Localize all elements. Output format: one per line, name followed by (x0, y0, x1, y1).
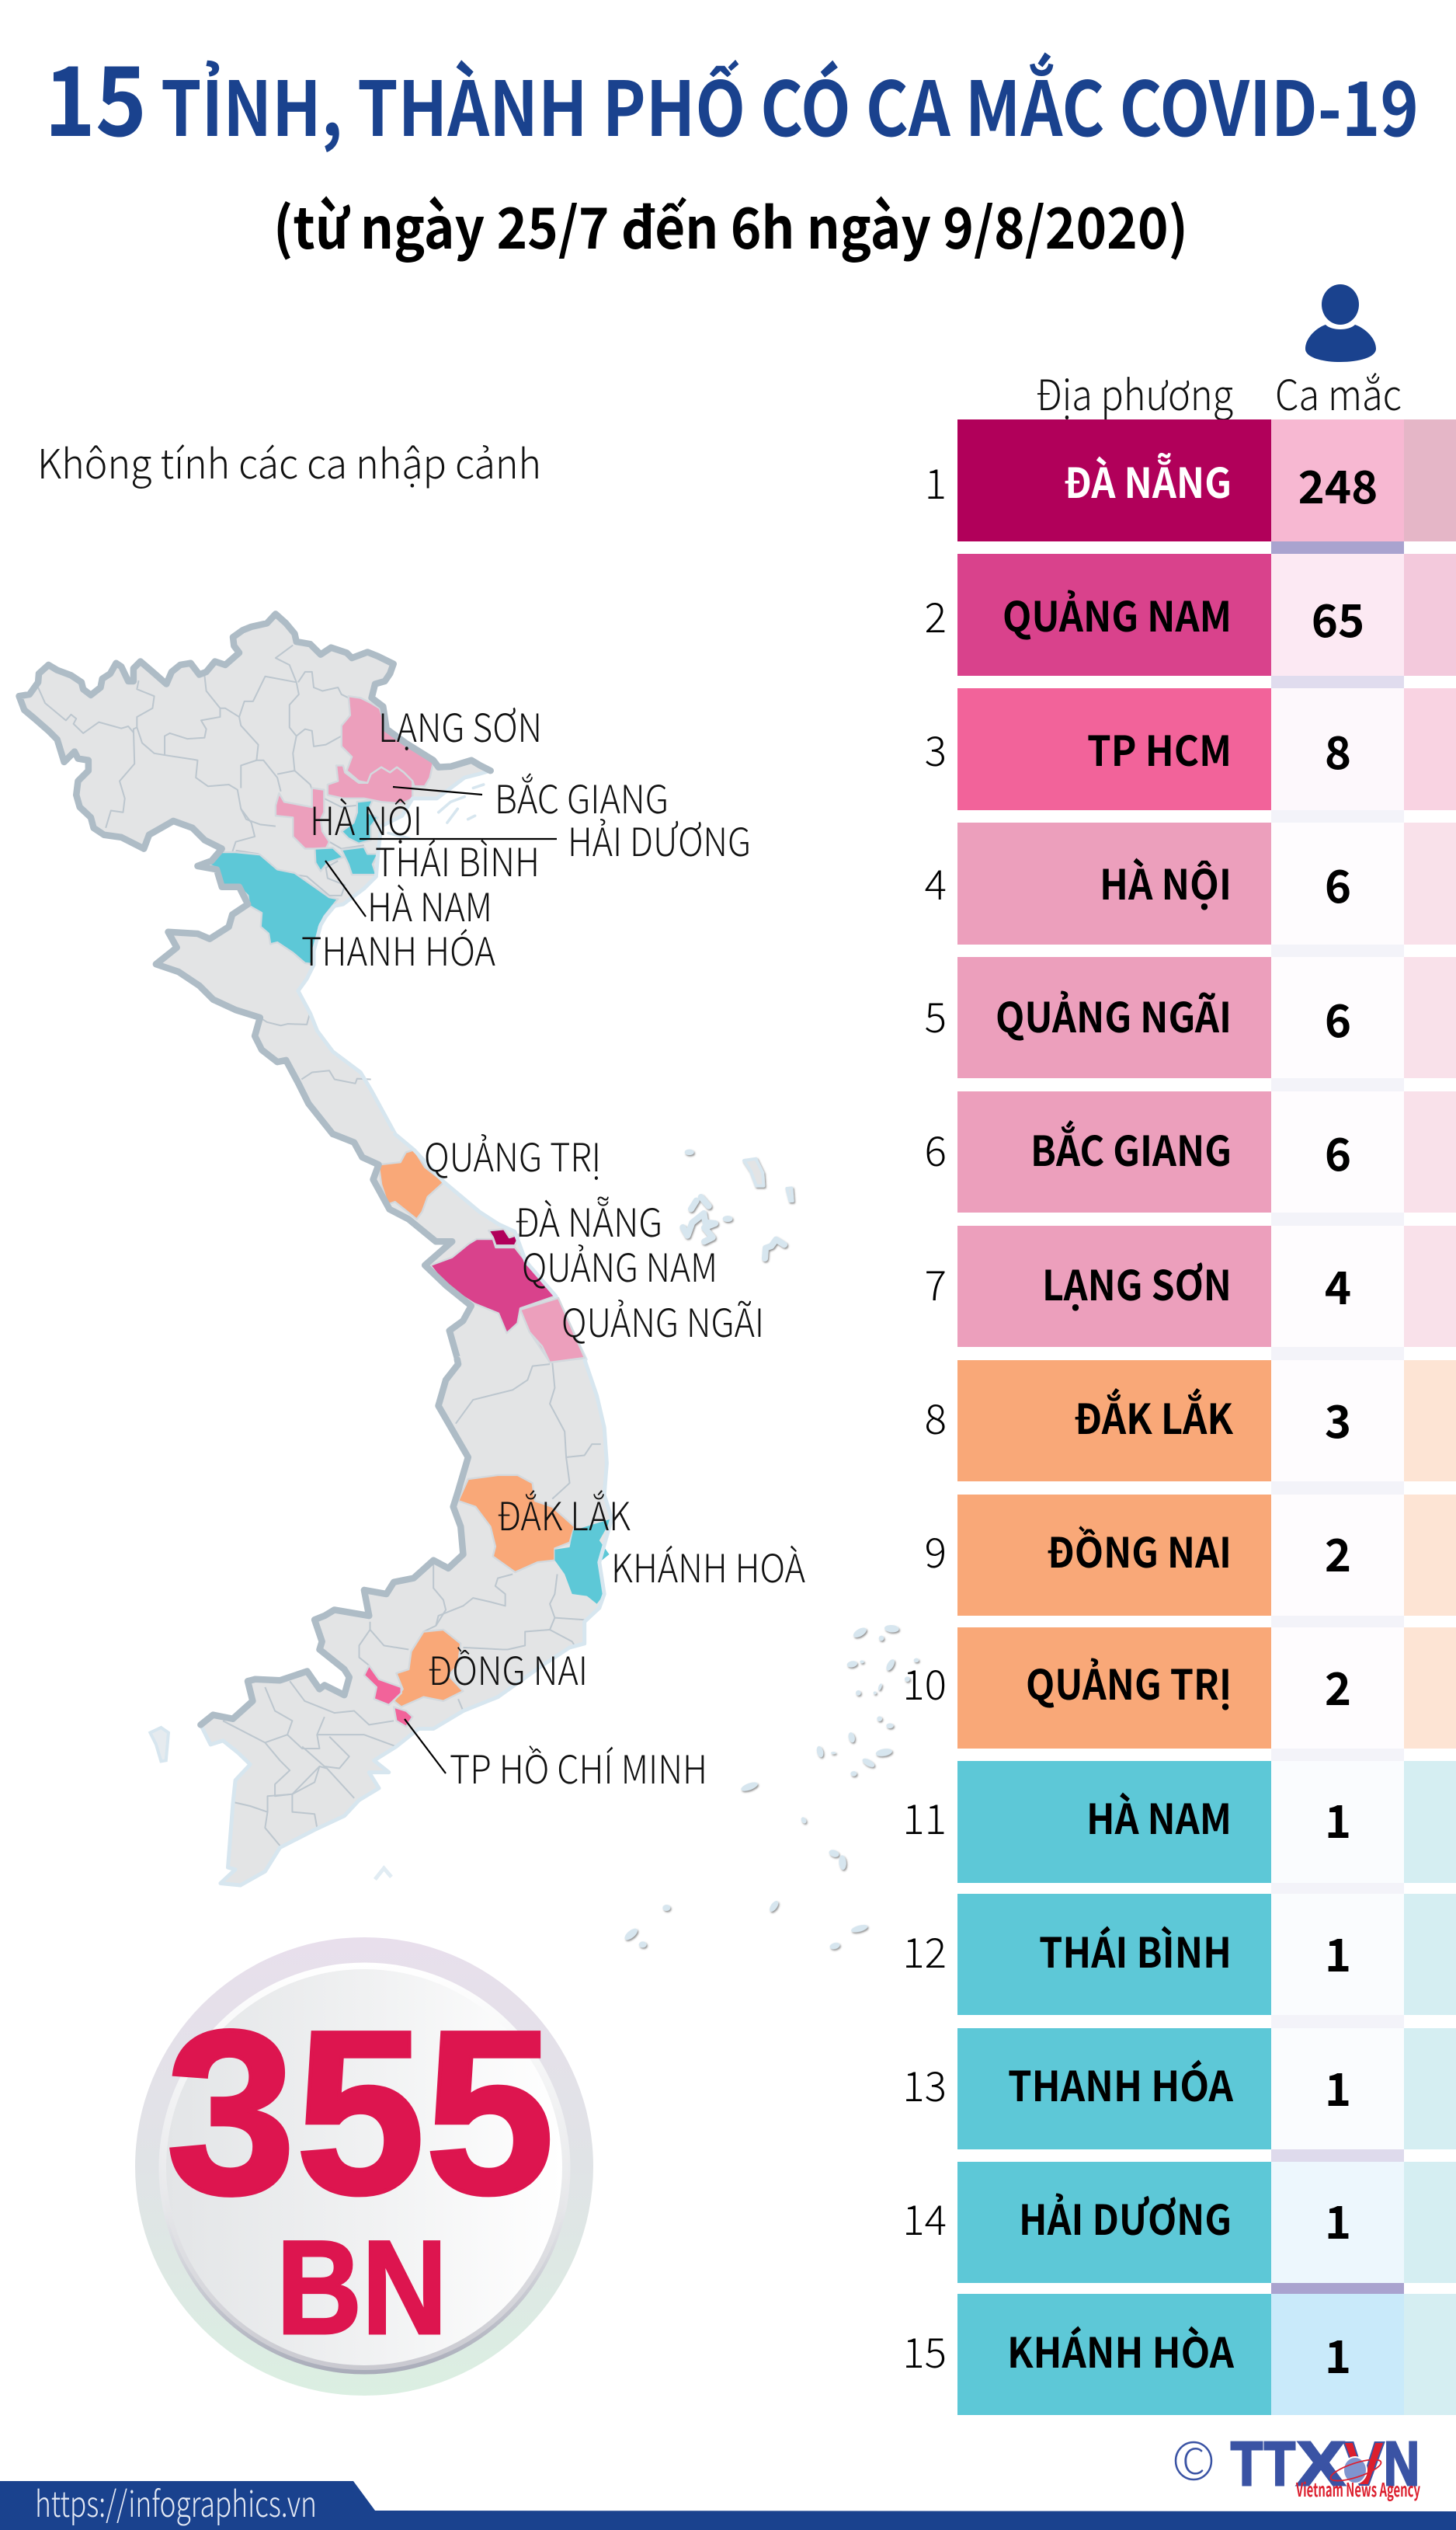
logo: copyright and TTXVN (1176, 2429, 1420, 2502)
row 10: Quảng Trị: 10 (902, 1653, 947, 1712)
unit: BN: BN (276, 2213, 447, 2362)
row 3: TP HCM (925, 688, 1456, 810)
row 12: Thái Bình (902, 1894, 1456, 2015)
province: Thái Bình (342, 847, 378, 875)
row 6: Bắc Giang: 6 (925, 1119, 947, 1178)
row 6: Bắc Giang: BẮC GIANG (1030, 1119, 1232, 1178)
subtitle: (từ ngày 25/7 đến 6h ngày 9/8/2020) (273, 183, 1188, 266)
row 10: Quảng Trị: 2 (1325, 1653, 1351, 1718)
row 13: Thanh Hóa: 1 (1325, 2054, 1351, 2119)
province: Đắk Lắk (458, 1475, 575, 1572)
row 9: Đồng Nai: 2 (1325, 1519, 1351, 1585)
row 11: Hà Nam: 11 (902, 1787, 947, 1846)
province: Quảng Ngãi lower part (525, 1321, 585, 1362)
row 15: Khánh Hòa: 15 (902, 2321, 947, 2380)
row 12: Thái Bình: 1 (1325, 1919, 1351, 1985)
row 8: Đắk Lắk (925, 1360, 1456, 1481)
TTXVN letters (1231, 2429, 1420, 2498)
province: Quảng Nam (430, 1239, 556, 1333)
TTXVN letters: X (1297, 2429, 1345, 2498)
map: southern section (150, 1321, 612, 1885)
row 1: Đà Nẵng: 1 (925, 452, 947, 511)
title: 15 (44, 24, 147, 164)
badge rim (158, 1962, 570, 2374)
separator cells between rows (1271, 541, 1404, 2294)
map labels: QUẢNG TRỊ (424, 1127, 601, 1183)
row 14: Hải Dương: HẢI DƯƠNG (1019, 2188, 1232, 2247)
map labels: QUẢNG NAM (522, 1237, 718, 1293)
province: Khánh Hòa (554, 1519, 612, 1604)
row 10: Quảng Trị: QUẢNG TRỊ (1026, 1653, 1232, 1712)
row 14: Hải Dương (902, 2162, 1456, 2283)
islands: Hoàng Sa (683, 1151, 793, 1258)
row 4: Hà Nội: 4 (925, 853, 947, 912)
province: Đồng Nai (394, 1630, 463, 1707)
row 11: Hà Nam (902, 1761, 1456, 1883)
row 13: Thanh Hóa: THANH HÓA (1008, 2055, 1234, 2114)
TTXVN letters: T (1231, 2429, 1263, 2498)
total badge: 355 BN (135, 1937, 593, 2396)
footer URL: https://infographics.vn (35, 2476, 317, 2528)
province: Hải Dương (342, 800, 378, 844)
map: central section (330, 1132, 586, 1359)
row 4: Hà Nội (925, 823, 1456, 945)
row 6: Bắc Giang (925, 1091, 1456, 1213)
row 2: Quảng Nam: 2 (925, 586, 947, 645)
coastal islets: Quảng Ninh (388, 785, 484, 838)
row 9: Đồng Nai: ĐỒNG NAI (1047, 1521, 1232, 1580)
row 3: TP HCM: TP HCM (1087, 719, 1232, 778)
province: Quảng Trị (379, 1150, 444, 1220)
row 5: Quảng Ngãi (925, 957, 1456, 1078)
province: TP Hồ Chí Minh (394, 1707, 412, 1727)
map labels: THÁI BÌNH (375, 832, 540, 888)
province: TP Hồ Chí Minh north part (364, 1665, 401, 1705)
total number: 355 (166, 1982, 554, 2243)
row 4: Hà Nội: HÀ NỘI (1100, 853, 1232, 912)
row 5: Quảng Ngãi: QUẢNG NGÃI (996, 986, 1232, 1045)
row 8: Đắk Lắk: 8 (925, 1387, 947, 1446)
map labels: ĐẮK LẮK (497, 1486, 631, 1542)
province: Đà Nẵng (488, 1229, 520, 1245)
row 15: Khánh Hòa: 1 (1325, 2321, 1351, 2386)
row 1: Đà Nẵng: 248 (1298, 451, 1378, 517)
row 12: Thái Bình: 12 (902, 1921, 947, 1980)
island: Côn Đảo (375, 1868, 391, 1879)
map labels: BẮC GIANG (495, 769, 669, 825)
map labels: KHÁNH HOÀ (611, 1538, 805, 1594)
map labels: HÀ NAM (367, 877, 492, 933)
row 7: Lạng Sơn: 4 (1325, 1252, 1351, 1317)
TTXVN letters: V (1343, 2429, 1385, 2498)
row 4: Hà Nội: 6 (1325, 851, 1351, 916)
map leader lines (325, 787, 557, 1773)
copyright mark: C (1183, 2434, 1204, 2485)
row 11: Hà Nam: HÀ NAM (1086, 1787, 1232, 1846)
table of 15 localities (902, 419, 1456, 2415)
row 2: Quảng Nam: 65 (1312, 585, 1364, 650)
island: Phú Quốc (150, 1728, 169, 1761)
province: Thanh Hóa (208, 852, 338, 964)
icon: person (1305, 284, 1376, 362)
row 13: Thanh Hóa (902, 2028, 1456, 2149)
row 1: Đà Nẵng (925, 419, 1456, 541)
row 14: Hải Dương: 14 (902, 2188, 947, 2247)
row 6: Bắc Giang: 6 (1325, 1119, 1351, 1184)
map labels: QUẢNG NGÃI (561, 1293, 764, 1349)
map of Vietnam (19, 614, 919, 1951)
province: Hà Nam (314, 847, 343, 872)
row 13: Thanh Hóa: 13 (902, 2055, 947, 2114)
TTXVN letters: T (1264, 2429, 1295, 2498)
map labels: HẢI DƯƠNG (568, 812, 751, 868)
province: Bắc Giang (328, 765, 412, 804)
row 5: Quảng Ngãi: 6 (1325, 985, 1351, 1050)
badge face (166, 1969, 562, 2365)
map: northern section (19, 614, 491, 1134)
province: Lạng Sơn (342, 696, 433, 786)
map labels: TP HỒ CHÍ MINH (450, 1739, 707, 1795)
province: Hà Nội (276, 788, 329, 849)
row 5: Quảng Ngãi: 5 (925, 986, 947, 1045)
note: excluded imported cases: Không tính các ca nhập cảnh (37, 432, 541, 490)
row 2: Quảng Nam: QUẢNG NAM (1003, 585, 1232, 644)
row 8: Đắk Lắk: ĐẮK LẮK (1074, 1387, 1234, 1446)
map labels (301, 698, 805, 1795)
row 12: Thái Bình: THÁI BÌNH (1039, 1921, 1232, 1980)
footer band with URL (0, 2476, 1456, 2530)
map labels: HÀ NỘI (310, 791, 422, 847)
row 1: Đà Nẵng: ĐÀ NẴNG (1064, 451, 1232, 510)
row 9: Đồng Nai: 9 (925, 1521, 947, 1580)
table header: cases: Ca mắc (1275, 361, 1402, 423)
copyright mark (1176, 2434, 1211, 2485)
province: Quảng Ngãi (520, 1298, 585, 1362)
row 8: Đắk Lắk: 3 (1325, 1386, 1351, 1451)
row 3: TP HCM: 3 (925, 719, 947, 778)
row 15: Khánh Hòa (902, 2294, 1456, 2415)
row 7: Lạng Sơn (925, 1226, 1456, 1347)
table header: locality: Địa phương (1036, 361, 1233, 423)
row 2: Quảng Nam (925, 554, 1456, 676)
row 11: Hà Nam: 1 (1325, 1786, 1351, 1851)
map labels: ĐỒNG NAI (428, 1641, 588, 1697)
map labels: ĐÀ NẴNG (515, 1192, 662, 1248)
row 9: Đồng Nai (925, 1495, 1456, 1616)
globe and orbit (1329, 2455, 1383, 2485)
islands: Trường Sa (623, 1624, 919, 1951)
row 3: TP HCM: 8 (1325, 717, 1351, 782)
map labels: THANH HÓA (301, 921, 495, 977)
row 7: Lạng Sơn: 7 (925, 1254, 947, 1313)
row 7: Lạng Sơn: LẠNG SƠN (1042, 1254, 1232, 1313)
TTXVN letters: N (1384, 2429, 1420, 2498)
row 15: Khánh Hòa: KHÁNH HÒA (1007, 2321, 1235, 2380)
badge outer ring (135, 1937, 593, 2396)
row 10: Quảng Trị (902, 1627, 1456, 1749)
row 14: Hải Dương: 1 (1325, 2187, 1351, 2252)
map labels: LẠNG SƠN (378, 698, 542, 753)
